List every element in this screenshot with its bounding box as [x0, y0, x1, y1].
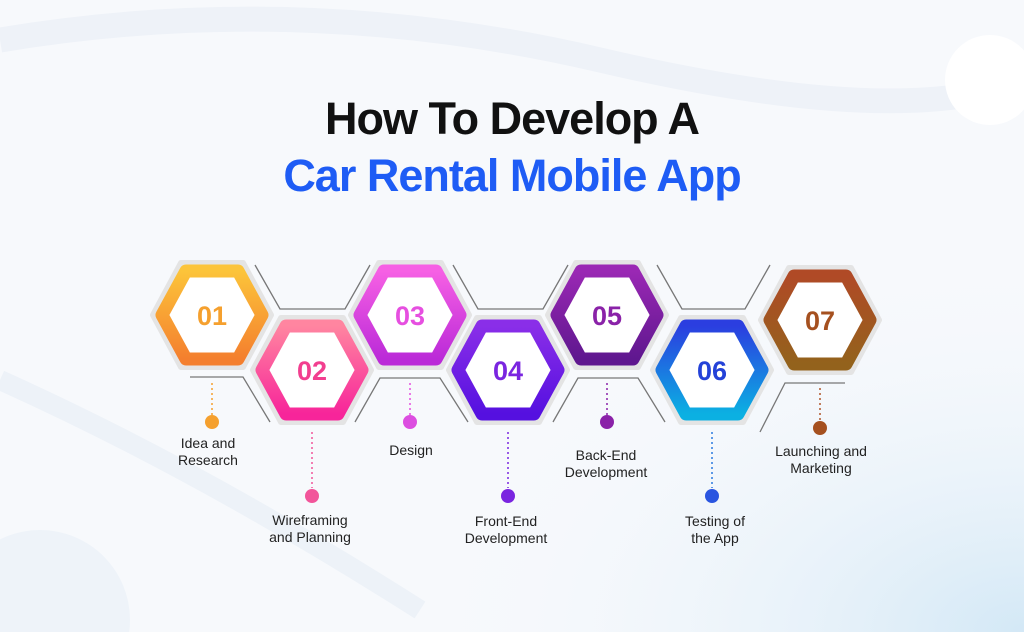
label 01: Idea and: [181, 435, 235, 451]
hex 05: 05: [592, 301, 622, 331]
hex 03: 03: [395, 301, 425, 331]
label 05: Back-End: [576, 447, 636, 463]
label 04: Front-End: [475, 513, 537, 529]
label 04: [465, 513, 548, 546]
label 02: and Planning: [269, 529, 351, 545]
label 06: Testing of: [685, 513, 745, 529]
label 01: [178, 435, 238, 468]
label 06: [685, 513, 746, 546]
label 07: Marketing: [790, 460, 852, 476]
title: Car Rental Mobile App: [283, 150, 741, 201]
hex 06: 06: [697, 356, 727, 386]
label 04: Development: [465, 530, 547, 546]
label 03: Design: [389, 442, 433, 458]
title: How To Develop A: [325, 93, 699, 144]
label 07: [775, 443, 867, 476]
hex 04: [449, 318, 567, 422]
hex 02: 02: [297, 356, 327, 386]
label 01: Research: [178, 452, 238, 468]
label 06: the App: [691, 530, 739, 546]
dots: [205, 415, 827, 503]
hex 07: 07: [805, 306, 835, 336]
hex 01: [153, 263, 271, 367]
hex 05: [548, 263, 666, 367]
hex 01: 01: [197, 301, 227, 331]
label 02: [269, 512, 351, 545]
hex 07: [761, 268, 879, 372]
hex 06: [653, 318, 771, 422]
hex 02: [253, 318, 371, 422]
label 02: Wireframing: [272, 512, 348, 528]
label 07: Launching and: [775, 443, 867, 459]
label 05: [565, 447, 648, 480]
hex 03: [351, 263, 469, 367]
hex 04: 04: [493, 356, 523, 386]
label 05: Development: [565, 464, 647, 480]
title: [283, 93, 741, 201]
